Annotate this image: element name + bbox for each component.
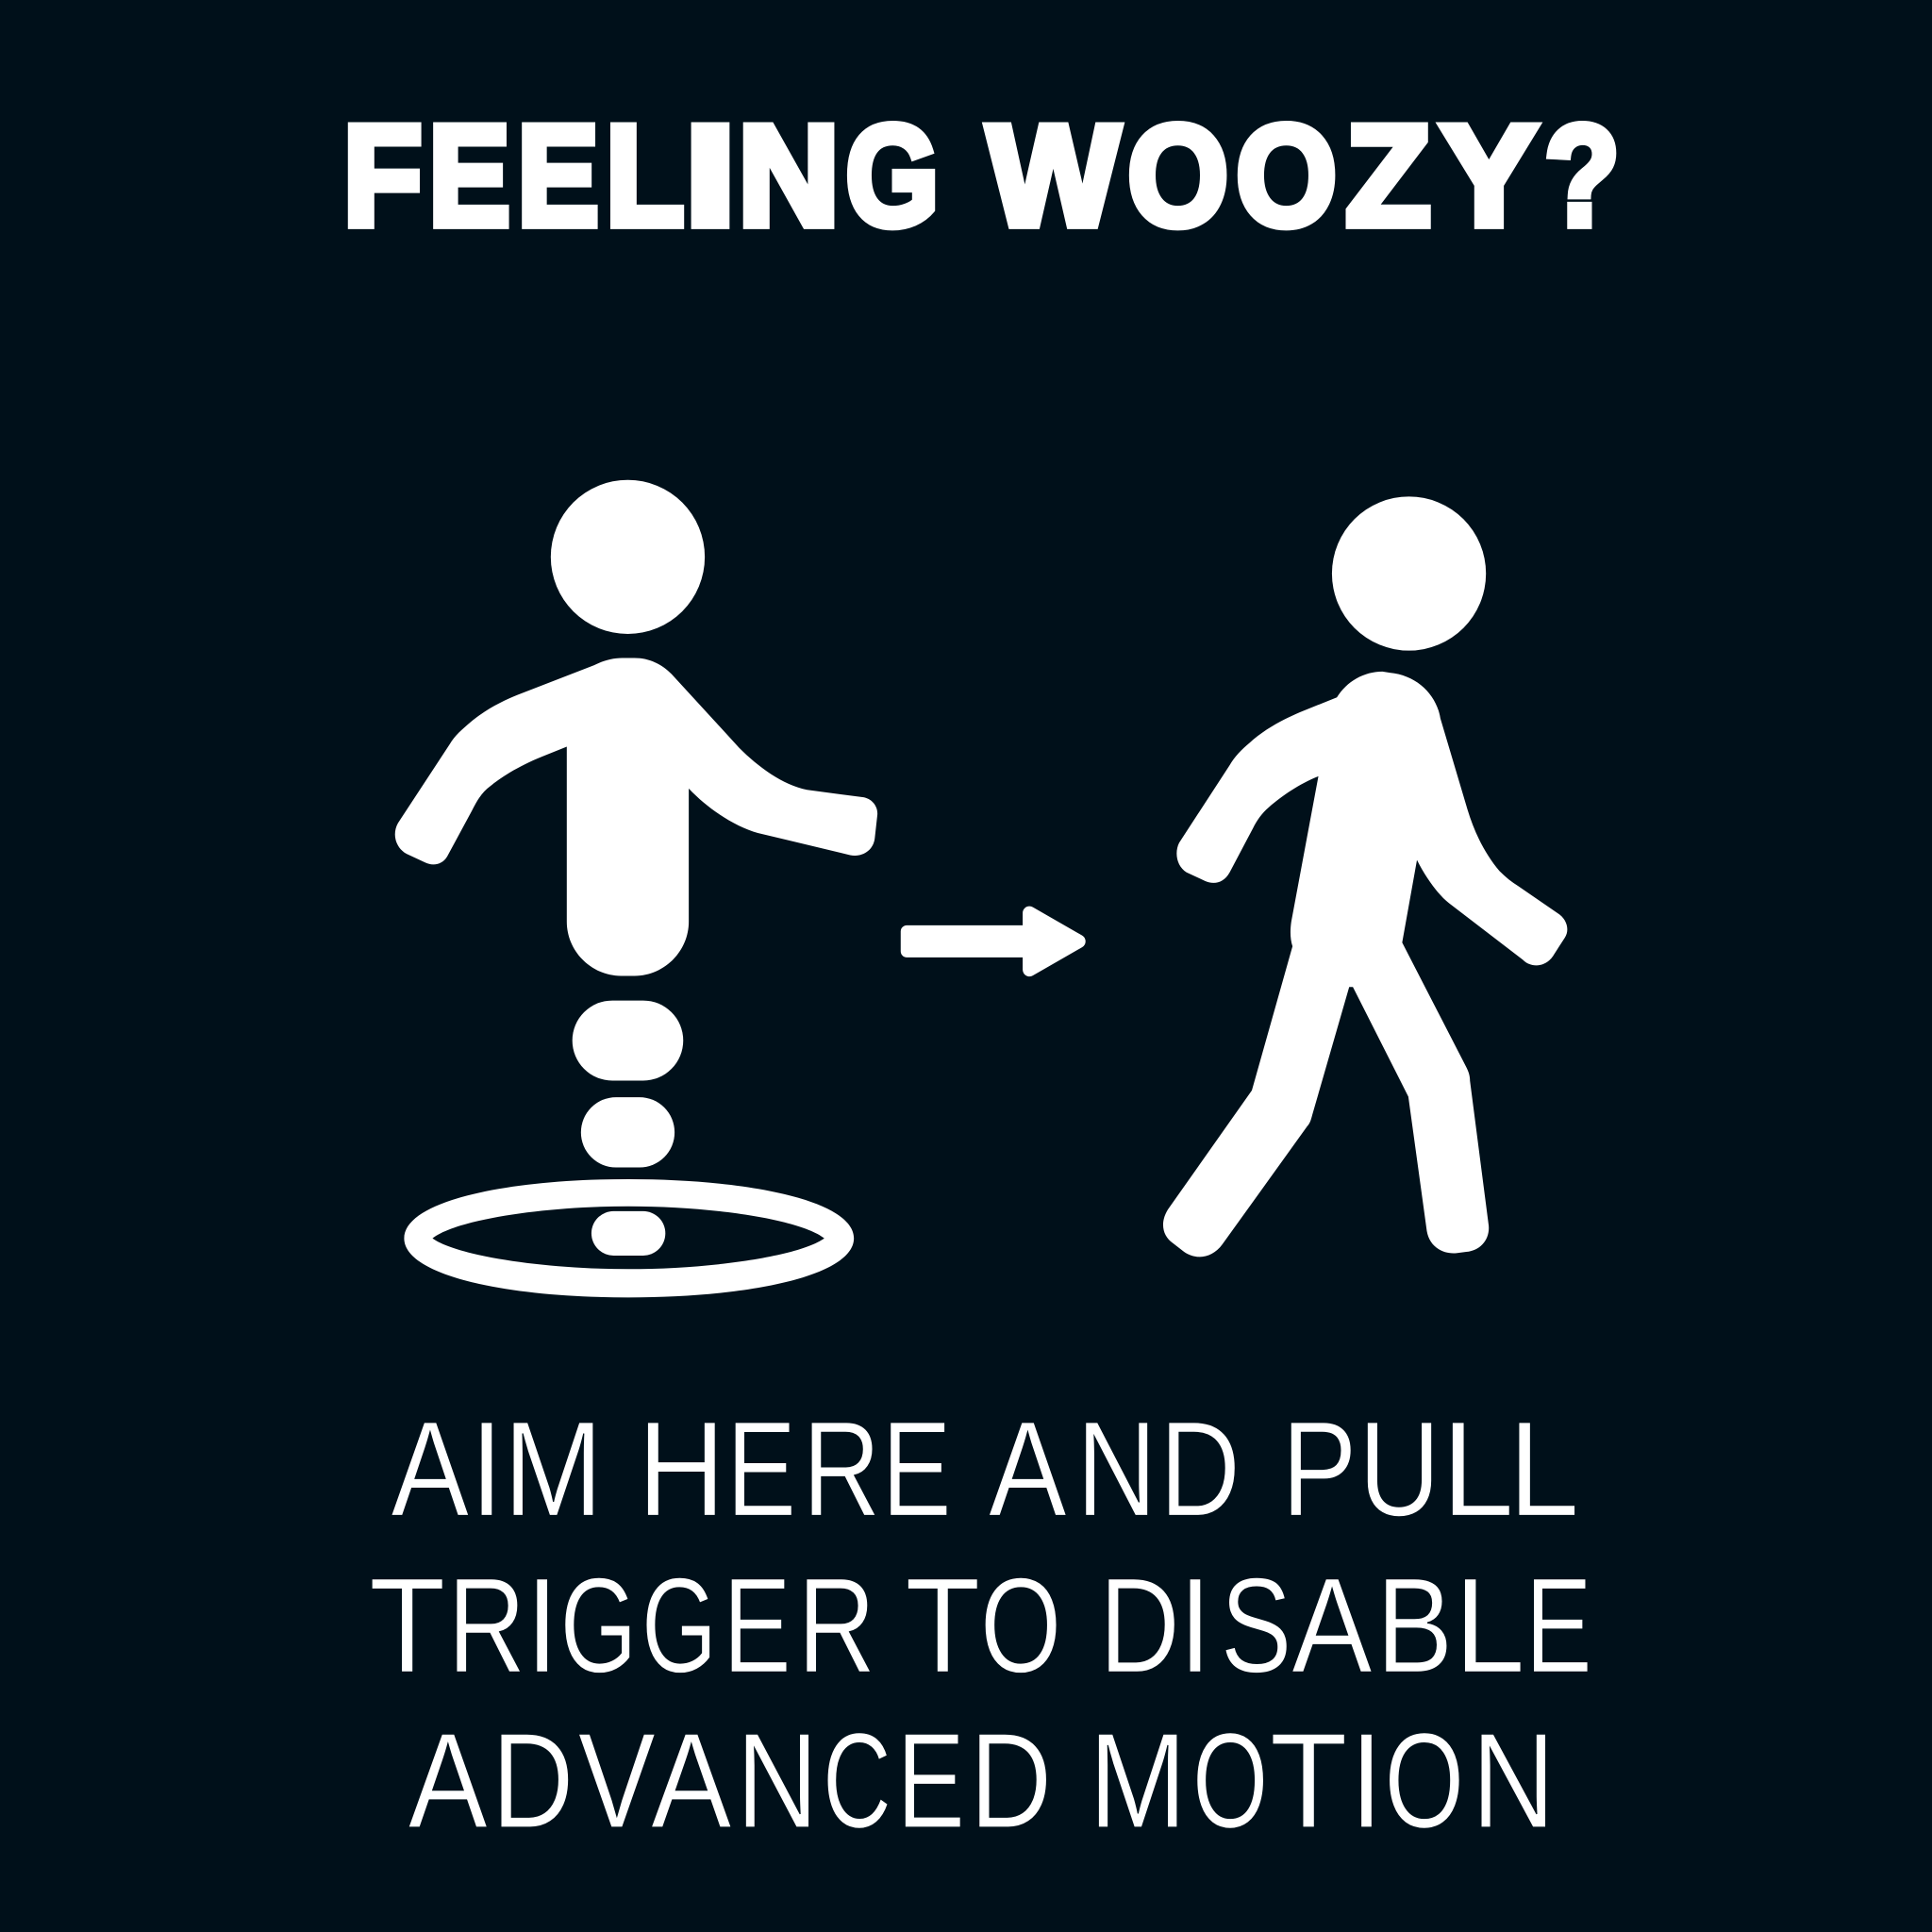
title: E — [428, 96, 510, 256]
line 2: I — [525, 1550, 558, 1701]
line 1: E — [882, 1394, 952, 1545]
line 3: A — [408, 1706, 488, 1857]
beam segment inside ring — [591, 1211, 665, 1256]
line 1: R — [803, 1394, 880, 1545]
line 1: H — [638, 1394, 725, 1545]
title: N — [738, 96, 840, 256]
title: I — [684, 96, 737, 256]
line 2: D — [1099, 1550, 1180, 1701]
line 1: I — [470, 1394, 504, 1545]
beam segment lower — [581, 1097, 675, 1168]
torso and arms — [395, 658, 877, 975]
line 3: D — [970, 1706, 1052, 1857]
title: Z — [1346, 96, 1431, 256]
head — [1332, 496, 1486, 651]
line 3: V — [578, 1706, 656, 1857]
head — [551, 480, 705, 634]
line 1: N — [1076, 1394, 1157, 1545]
line 2: R — [797, 1550, 875, 1701]
line 1: A — [989, 1394, 1067, 1545]
icon: person walking — [1163, 496, 1567, 1257]
line 3: N — [736, 1706, 818, 1857]
line 1: E — [726, 1394, 796, 1545]
title: L — [606, 96, 684, 256]
line 2: A — [1291, 1550, 1373, 1701]
title: G — [846, 96, 939, 256]
line 2: O — [980, 1550, 1061, 1701]
line 3: O — [1192, 1706, 1268, 1857]
line 3: I — [1350, 1706, 1383, 1857]
instruction text — [369, 1394, 1592, 1857]
line 2: L — [1454, 1550, 1525, 1701]
line 1: M — [504, 1394, 603, 1545]
line 1: A — [391, 1394, 469, 1545]
line 3: T — [1270, 1706, 1348, 1857]
line 2: E — [1525, 1550, 1592, 1701]
line 1: P — [1281, 1394, 1357, 1545]
line 3: O — [1384, 1706, 1464, 1857]
line 2: S — [1221, 1550, 1291, 1701]
title: F — [343, 96, 422, 256]
line 2: E — [723, 1550, 791, 1701]
beam segment upper — [573, 1001, 683, 1080]
line 2: B — [1376, 1550, 1453, 1701]
line 2: R — [448, 1550, 525, 1701]
line 2: G — [560, 1550, 638, 1701]
arrow — [901, 913, 1079, 970]
line 1: L — [1508, 1394, 1579, 1545]
title: O — [1236, 96, 1337, 256]
line 2: I — [1178, 1550, 1212, 1701]
line 2: T — [905, 1550, 980, 1701]
line 3: E — [896, 1706, 965, 1857]
line 3: C — [823, 1706, 891, 1857]
line 2: T — [369, 1550, 445, 1701]
line 3: N — [1472, 1706, 1556, 1857]
title: ? — [1544, 96, 1620, 256]
line 3: A — [651, 1706, 732, 1857]
body — [1163, 672, 1567, 1257]
line 3: D — [491, 1706, 575, 1857]
line 1: L — [1441, 1394, 1514, 1545]
title: W — [987, 96, 1120, 256]
line 2: G — [641, 1550, 717, 1701]
line 3: M — [1089, 1706, 1187, 1857]
line 1: D — [1159, 1394, 1241, 1545]
title: O — [1127, 96, 1228, 256]
icon: person standing with teleport beam — [395, 480, 877, 1297]
title: E — [517, 96, 599, 256]
title: Y — [1441, 96, 1538, 256]
line 1: U — [1358, 1394, 1441, 1545]
target ring — [404, 1179, 854, 1297]
